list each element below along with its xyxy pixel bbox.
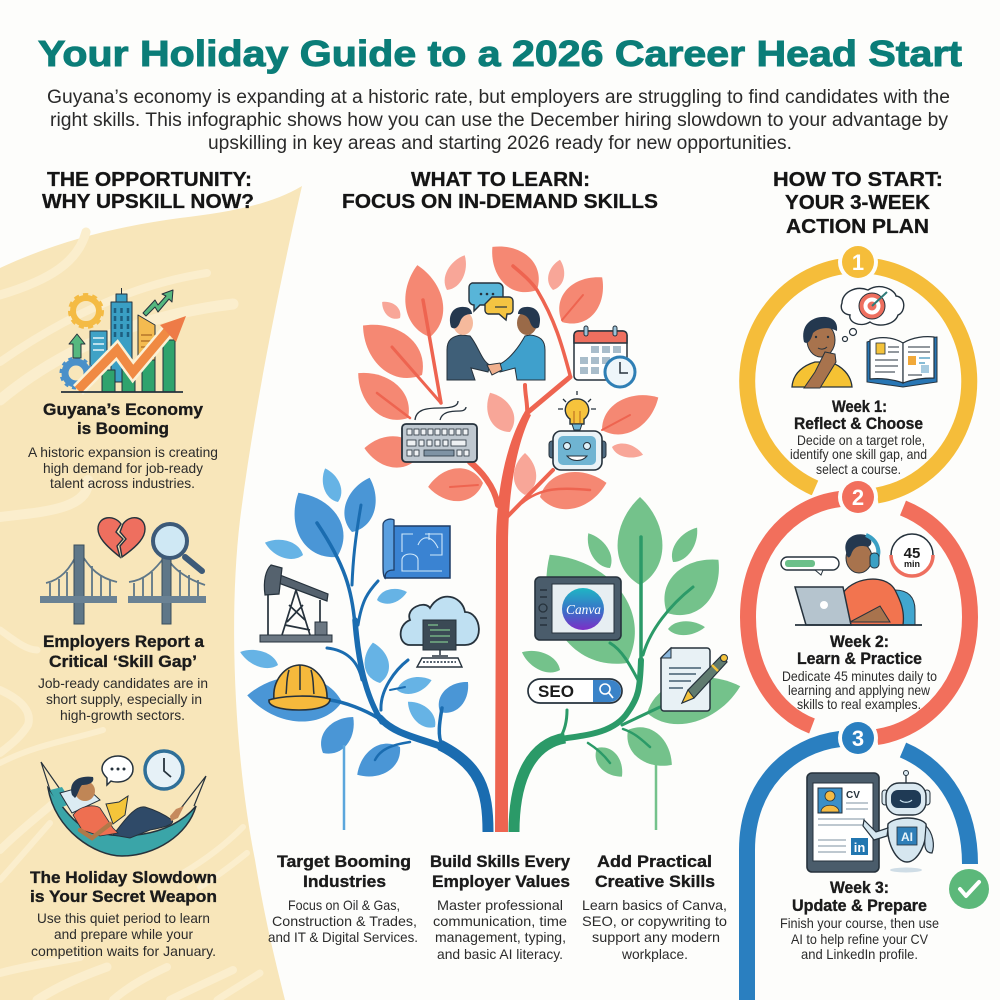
text: week 3: and LinkedIn profile. bbox=[801, 946, 918, 962]
icon: oil pump bbox=[260, 565, 332, 642]
text: creative skills: Add Practical bbox=[597, 853, 712, 871]
text: week 3: Update & Prepare bbox=[792, 897, 927, 915]
icon: cv tablet and ai robot bbox=[807, 770, 933, 872]
icon: economy growth bbox=[61, 288, 186, 392]
text: week 3 bbox=[780, 879, 939, 962]
text: week 1: identify one skill gap, and bbox=[790, 446, 927, 462]
text: skill gap: Job-ready candidates are in bbox=[38, 675, 208, 691]
intro text: upskilling in key areas and starting 2026 ready for new opportunities. bbox=[208, 133, 792, 154]
text: target booming industries: and IT & Digital Services. bbox=[268, 929, 418, 945]
blue tree bbox=[238, 465, 488, 832]
week 1 ring bbox=[747, 265, 969, 496]
text: skill gap: high-growth sectors. bbox=[60, 707, 185, 723]
text: skill gap bbox=[38, 633, 208, 723]
icon: learner with laptop and timer bbox=[781, 534, 933, 625]
text: week 2: skills to real examples. bbox=[797, 696, 921, 712]
text: target booming industries: Focus on Oil & Gas, bbox=[288, 897, 400, 913]
text: week 2: Learn & Practice bbox=[797, 650, 922, 668]
text: build skills: management, typing, bbox=[435, 929, 566, 945]
heading: the opportunity bbox=[42, 169, 254, 213]
text: target booming industries: Construction & Trades, bbox=[272, 913, 417, 929]
text: week 2: Dedicate 45 minutes daily to bbox=[782, 668, 937, 684]
red tree bbox=[347, 234, 666, 832]
text: skill gap: short supply, especially in bbox=[46, 691, 202, 707]
text: week 1: select a course. bbox=[816, 461, 901, 477]
badge 3: 3 bbox=[852, 726, 864, 751]
icon: blueprint bbox=[383, 519, 450, 578]
intro text: right skills. This infographic shows how you can use the December hiring slowdown to your advantage by bbox=[50, 110, 948, 131]
text: build skills: Employer Values bbox=[432, 873, 570, 891]
text: creative skills: support any modern bbox=[592, 929, 720, 945]
badge 1 bbox=[838, 242, 878, 282]
text: week 1: Decide on a target role, bbox=[797, 432, 925, 448]
icon: robot with light bulb bbox=[549, 391, 606, 470]
text: week 1: Week 1: bbox=[832, 398, 887, 416]
icon: seo search bar: SEO bbox=[538, 682, 574, 701]
title: Your Holiday Guide to a 2026 Career Head Start bbox=[38, 33, 962, 74]
text: holiday slowdown: is Your Secret Weapon bbox=[30, 888, 217, 906]
icon: thinking person with book bbox=[792, 287, 937, 388]
heading: what to learn: FOCUS ON IN-DEMAND SKILLS bbox=[342, 191, 658, 213]
icon: canva tablet: Canva bbox=[566, 603, 601, 618]
icon: hammock reader bbox=[41, 751, 206, 856]
text: economy booming bbox=[28, 401, 218, 491]
panel: sand background bbox=[0, 186, 302, 1000]
text: build skills: and basic AI literacy. bbox=[437, 946, 563, 962]
icon: learner with laptop and timer: 45 bbox=[904, 545, 920, 562]
icon: hard hat bbox=[269, 665, 330, 710]
heading: what to learn bbox=[342, 169, 658, 213]
text: build skills: communication, time bbox=[433, 913, 567, 929]
icon: broken bridge and heart bbox=[40, 518, 206, 624]
badge 1: 1 bbox=[852, 250, 864, 275]
text: week 2 bbox=[782, 633, 937, 712]
heading: the opportunity: THE OPPORTUNITY: bbox=[47, 169, 252, 191]
text: week 3: Finish your course, then use bbox=[780, 915, 939, 931]
icon: calendar and clock bbox=[574, 326, 635, 387]
text: economy booming: high demand for job-ready bbox=[43, 460, 203, 476]
text: build skills bbox=[430, 853, 571, 962]
text: holiday slowdown: The Holiday Slowdown bbox=[30, 869, 217, 887]
text: build skills: Build Skills Every bbox=[430, 853, 571, 871]
text: economy booming: talent across industries. bbox=[50, 475, 195, 491]
icon: canva tablet bbox=[535, 577, 621, 640]
text: holiday slowdown: and prepare while your bbox=[54, 926, 193, 942]
heading: the opportunity: WHY UPSKILL NOW? bbox=[42, 191, 254, 213]
heading: how to start: ACTION PLAN bbox=[786, 216, 929, 238]
icon: cv tablet and ai robot: CV bbox=[846, 790, 860, 801]
text: build skills: Master professional bbox=[437, 897, 563, 913]
heading: how to start: HOW TO START: bbox=[773, 169, 943, 191]
text: creative skills: Creative Skills bbox=[595, 873, 715, 891]
intro text: Guyana’s economy is expanding at a historic rate, but employers are struggling to find candidates with the bbox=[47, 87, 950, 108]
icon: seo search bar bbox=[528, 679, 622, 703]
text: skill gap: Critical ‘Skill Gap’ bbox=[49, 653, 197, 671]
text: week 3: AI to help refine your CV bbox=[791, 931, 929, 947]
text: week 2: Week 2: bbox=[830, 633, 889, 651]
green tree bbox=[514, 497, 746, 832]
text: creative skills bbox=[582, 853, 727, 962]
text: economy booming: is Booming bbox=[77, 420, 169, 438]
icon: cv tablet and ai robot: in bbox=[854, 840, 865, 855]
icon: green check bbox=[949, 869, 989, 909]
text: week 1: Reflect & Choose bbox=[794, 415, 923, 433]
heading: what to learn: WHAT TO LEARN: bbox=[411, 169, 590, 191]
text: economy booming: Guyana’s Economy bbox=[43, 401, 204, 419]
week 3 arch bbox=[747, 739, 970, 1000]
text: skill gap: Employers Report a bbox=[43, 633, 205, 651]
text: economy booming: A historic expansion is creating bbox=[28, 444, 218, 460]
icon: handshake bbox=[447, 283, 545, 380]
text: target booming industries: Industries bbox=[303, 873, 386, 891]
text: creative skills: SEO, or copywriting to bbox=[582, 913, 727, 929]
icon: cloud computer bbox=[401, 597, 479, 667]
text: creative skills: workplace. bbox=[621, 946, 688, 962]
week 2 ring bbox=[748, 499, 970, 737]
icon: document and pen bbox=[661, 648, 728, 711]
text: target booming industries: Target Booming bbox=[277, 853, 411, 871]
heading: how to start bbox=[773, 169, 943, 238]
text: week 3: Week 3: bbox=[830, 879, 889, 897]
text: week 1 bbox=[790, 398, 927, 477]
text: target booming industries bbox=[268, 853, 418, 945]
icon: learner with laptop and timer: min bbox=[904, 559, 920, 569]
icon: keyboard bbox=[402, 401, 477, 462]
intro text bbox=[47, 87, 950, 154]
badge 2: 2 bbox=[852, 485, 864, 510]
badge 3 bbox=[838, 718, 878, 758]
icon: cv tablet and ai robot: AI bbox=[901, 830, 913, 844]
text: week 2: learning and applying new bbox=[788, 682, 931, 698]
text: holiday slowdown bbox=[30, 869, 217, 959]
text: holiday slowdown: competition waits for January. bbox=[31, 943, 216, 959]
badge 2 bbox=[838, 477, 878, 517]
heading: how to start: YOUR 3-WEEK bbox=[785, 192, 931, 214]
text: creative skills: Learn basics of Canva, bbox=[582, 897, 727, 913]
text: holiday slowdown: Use this quiet period to learn bbox=[37, 910, 210, 926]
